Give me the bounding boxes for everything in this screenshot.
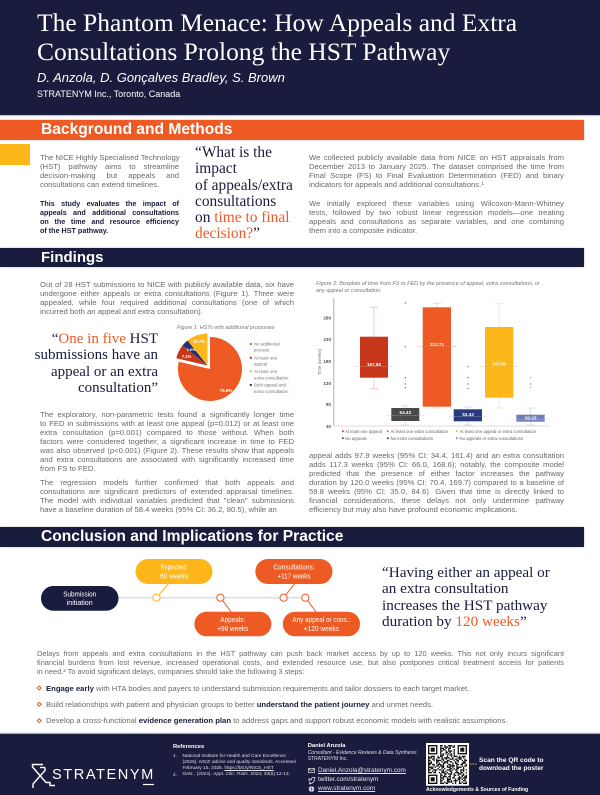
quote: research question: of appeals/extra xyxy=(195,177,293,194)
node: submission initiation xyxy=(41,586,118,611)
quote: research question: “What is the xyxy=(195,144,272,161)
y axis: 80 xyxy=(326,402,331,407)
text: data collected: December 2013 to January 2025. The dataset comprised the time from xyxy=(309,162,564,171)
figure 1 caption: Figure 1. HSTs with additional processes xyxy=(177,325,274,331)
heading: findings: Findings xyxy=(41,249,104,266)
QR call to action: download the poster xyxy=(479,765,543,772)
reference list: National Institute for Health and Care Excellence xyxy=(182,754,286,758)
pie legend: No additional xyxy=(254,342,280,347)
text: data collected: We collected publicly available data from NICE on HST appraisals from xyxy=(309,152,564,162)
quote: one in five: appeal or an extra xyxy=(51,364,158,380)
box: at least one appeal or extra consultation xyxy=(480,303,518,408)
text: exploratory tests: The exploratory, non-parametric tests found a significantly longer time xyxy=(40,410,294,419)
bullet icons xyxy=(37,686,41,723)
authors: D. Anzola, D. Gonçalves Bradley, S. Brown xyxy=(37,70,285,85)
references heading: References xyxy=(173,744,204,750)
pie chart: HSTs with additional processes: 10.7% xyxy=(193,339,205,344)
pie legend: extra consultation xyxy=(254,375,289,380)
logo wordmark: STRATENYM xyxy=(52,767,155,783)
quote: 120 weeks: increases the HST pathway xyxy=(382,597,547,614)
recommendation 1: Engage early with HTA bodies and payers to understand submission requirements and tailor dossiers to each target market. xyxy=(46,684,469,692)
text: exploratory tests: factors were considered together, a significant increase in time to FED xyxy=(40,437,294,446)
text: conclusion paragraph: Delays from appeals and extra consultations in the HST pathway can push back market access by up to 120 weeks. This not only incurs significant xyxy=(37,649,564,658)
text: statistical methods: We initially explored these variables using Wilcoxon-Mann-Whitney xyxy=(309,198,564,208)
box: at least one extra consultation: 212.71 xyxy=(430,342,444,347)
quote: one in five: submissions have an xyxy=(35,347,158,363)
text: regression models: have a baseline duration of 58.4 weeks (95% CI: 36.2, 80.5), while an xyxy=(40,505,277,514)
text: data collected xyxy=(309,152,564,189)
quote: 120 weeks: an extra consultation xyxy=(382,580,509,597)
text: study aim: on the time and resource efficiency xyxy=(40,217,179,226)
text: background intro: The NICE Highly Specialised Technology xyxy=(40,152,180,162)
text: regression results: adds 117.3 weeks (95% CI: 66.0, 168.6); notably, the composite model xyxy=(309,460,564,469)
timeline diagram xyxy=(41,559,360,636)
quote: research question xyxy=(195,144,293,242)
text: exploratory tests: extra consultation (p=0.001) compared to those without. When both xyxy=(40,428,294,437)
text: regression results: efficiency but may also have profound economic implications. xyxy=(309,505,517,514)
node: expected 60 weeks: 60 weeks xyxy=(160,572,188,580)
y axis: 230 xyxy=(323,337,331,342)
node: expected 60 weeks: Expected: xyxy=(160,562,188,572)
footer banner xyxy=(0,734,600,795)
quote: research question: on time to final xyxy=(195,209,289,226)
text: regression results: appeal adds 97.9 weeks (95% CI: 34.4, 161.4) and an extra consultation xyxy=(309,450,564,460)
box: no appeals: 54.43 xyxy=(400,410,411,415)
y axis: 180 xyxy=(323,359,331,364)
text: statistical methods: appeals and consultations as separate variables, and one combining xyxy=(309,217,564,226)
text: conclusion paragraph: financial burdens from lost revenue, increased operational costs, and extended resource use, but also postpones critical treatment access for patients xyxy=(37,658,564,667)
pie chart: HSTs with additional processes xyxy=(176,334,242,401)
heading: conclusion: Conclusion and Implications for Practice xyxy=(41,528,343,545)
arrow: QR pointer xyxy=(470,763,477,765)
boxplot legend: No appeals xyxy=(345,436,367,441)
pie chart: HSTs with additional processes: 3.6% xyxy=(186,347,196,352)
title: Consultations Prolong the HST Pathway xyxy=(37,37,450,66)
quote: one in five: consultation” xyxy=(78,380,158,396)
text: background intro: (HST) pathway aims to streamline xyxy=(40,162,179,171)
quote: one in five xyxy=(35,331,158,396)
text: conclusion paragraph: in need.² To avoid significant delays, companies should take the following 3 steps: xyxy=(37,667,304,676)
QR call to action: Scan the QR code to xyxy=(479,757,543,764)
box: no extra consultations: 53.43 xyxy=(462,412,474,417)
text: study aim: of the HST pathway. xyxy=(40,226,108,235)
reference list: 1. xyxy=(173,754,177,758)
text: regression results: 59.8 weeks (95% CI: 35.0, 84.6). Given that time is directly linked to xyxy=(309,487,564,496)
title: The Phantom Menace: How Appeals and Extra xyxy=(37,8,517,37)
QR call to action xyxy=(479,757,544,772)
node: submission initiation: Submission xyxy=(63,590,96,598)
figure 2 caption xyxy=(316,281,540,294)
reference list: February 15, 2025. https://bit.ly/NICE_HST xyxy=(182,766,274,771)
node: appeals +98 weeks: +98 weeks xyxy=(217,624,248,633)
node: any appeal or consultation +120 weeks: Any appeal or cons.: xyxy=(292,615,350,624)
pie legend: At least one xyxy=(254,369,278,374)
boxplot legend: At least one appeal or extra consultation xyxy=(460,429,537,434)
contact details: STRATENYM Inc. xyxy=(308,756,348,762)
quote: research question: consultations xyxy=(195,193,276,210)
contact details: Consultant - Evidence Reviews & Data Synthesis xyxy=(308,750,417,756)
text: regression models xyxy=(40,478,294,514)
node: any appeal or consultation +120 weeks: +120 weeks xyxy=(304,624,339,633)
node: consultations +117 weeks: +117 weeks xyxy=(278,572,311,580)
quote: one in five: “One in five HST xyxy=(52,331,158,347)
header banner xyxy=(0,0,600,115)
box: no appeals or extra consultations: 50.23 xyxy=(525,416,537,420)
pie legend: appeal xyxy=(254,362,267,367)
text: regression results: predicted that the presence of either factor increases the pathway xyxy=(309,469,564,478)
text: exploratory tests: was also observed (p<0.001) (Figure 2). These results show that appeals xyxy=(40,446,294,455)
heading: conclusion xyxy=(0,527,584,547)
affiliation: STRATENYM Inc., Toronto, Canada xyxy=(37,89,180,99)
text: regression results: duration by 120.0 weeks (95% CI: 70.4, 169.7) compared to a baseline of xyxy=(309,478,564,487)
timeline track xyxy=(118,597,305,599)
text: statistical methods: them into a composite indicator. xyxy=(309,226,417,235)
reference list: 2. xyxy=(173,772,177,778)
title xyxy=(37,8,517,66)
node: appeals +98 weeks: Appeals: xyxy=(220,615,245,624)
pie legend: process xyxy=(254,348,270,353)
pie legend: At least one xyxy=(254,356,278,360)
box: at least one appeal: 167.80 xyxy=(367,362,381,367)
text: study aim: This study evaluates the impact of xyxy=(40,198,179,208)
quote: research question: decision?” xyxy=(195,225,260,242)
box: no extra consultations xyxy=(449,366,487,425)
quote: 120 weeks: “Having either an appeal or xyxy=(382,564,550,581)
twitter: twitter.com/stratenym xyxy=(318,776,378,783)
email: Daniel.Anzola@stratenym.com xyxy=(318,767,406,774)
pie legend xyxy=(250,342,289,394)
boxplot legend: No appeals or extra consultations xyxy=(460,436,523,441)
text: study aim xyxy=(40,198,180,235)
text: findings intro: appealed, while four required additional consultations (one of which xyxy=(40,298,294,307)
quote: 120 weeks xyxy=(382,564,550,630)
text: exploratory tests: and extra consultations are associated with significantly increased time xyxy=(40,455,294,464)
text: study aim: appeals and additional consultations xyxy=(40,208,179,217)
text: statistical methods xyxy=(309,198,564,235)
text: background intro: decision-making but appeals and xyxy=(40,171,179,180)
text: regression models: The model with individual variables predicted that "clean" submissions xyxy=(40,496,294,505)
figure 2 caption: Figure 2: Boxplots of time from FS to FED by the presence of appeal, extra consultations, or xyxy=(316,281,540,287)
text: exploratory tests: to FED in submissions with at least one appeal (p=0.012) or at least one xyxy=(40,419,294,428)
text: data collected: indicators for appeals and additional consultations.¹ xyxy=(309,180,484,189)
box: at least one appeal xyxy=(355,307,392,389)
y axis: 280 xyxy=(323,316,331,320)
boxplot legend xyxy=(342,429,537,441)
recommendation 2: Build relationships with patient and physician groups to better understand the patient journey and unmet needs. xyxy=(46,700,433,709)
text: background intro: consultations can extend timelines. xyxy=(40,180,159,189)
icon: twitter xyxy=(309,778,315,784)
yellow accent block xyxy=(0,144,30,165)
pie chart: HSTs with additional processes: 7.1% xyxy=(182,354,192,359)
figure 2 caption: any appeal or consultation xyxy=(316,288,380,294)
icon: globe xyxy=(309,786,314,792)
node: consultations +117 weeks: Consultations: xyxy=(274,562,314,572)
y axis: 130 xyxy=(323,381,331,386)
text: conclusion paragraph xyxy=(37,649,564,676)
pie legend: extra consultation xyxy=(254,389,289,394)
text: regression models: consultations are significant predictors of extended appraisal timelines. xyxy=(40,487,294,496)
box: no appeals xyxy=(387,302,424,425)
icon: email xyxy=(308,768,314,773)
text: regression models: The regression models further confirmed that both appeals and xyxy=(40,478,294,487)
text: exploratory tests: from FS to FED. xyxy=(40,464,96,473)
text: findings intro: Out of 28 HST submissions to NICE with publicly available data, six have xyxy=(40,280,294,289)
quote: 120 weeks: duration by 120 weeks” xyxy=(382,613,527,630)
box: no appeals or extra consultations xyxy=(511,377,550,425)
y axis: 30 xyxy=(326,424,331,429)
node: expected 60 weeks xyxy=(136,559,212,601)
acknowledgements: Acknowledgements & Sources of Funding xyxy=(426,786,528,792)
QR code xyxy=(426,743,469,786)
text: data collected: Final Scope (FS) to Final Evaluation Determination (FED) and binary xyxy=(309,171,564,180)
y axis: Time (weeks) xyxy=(317,348,322,375)
reference list: (2025). NICE advice and quality standards. Accessed xyxy=(182,760,296,765)
text: background intro xyxy=(40,152,180,189)
text: regression results: financial considerations, these delays not only undermine pathway xyxy=(309,496,564,505)
boxplot chart: time from FS to FED xyxy=(317,298,550,429)
recommendation 3: Develop a cross-functional evidence generation plan to address gaps and support robust economic models with realistic assumptions. xyxy=(46,716,507,725)
reference list xyxy=(173,754,296,778)
reference list: Getz.. (2024). Appl. Clin. Trials. 2024; 33(6):12-13. xyxy=(182,772,290,777)
text: regression results xyxy=(309,450,564,514)
box: at least one extra consultation xyxy=(417,303,456,408)
quote: research question: impact xyxy=(195,160,237,177)
node: any appeal or consultation +120 weeks xyxy=(283,594,360,636)
heading: background and methods: Background and Methods xyxy=(41,121,232,138)
text: exploratory tests xyxy=(40,410,294,473)
text: findings intro: undergone either appeals or extra consultations (Figure 1). Three were xyxy=(40,289,294,298)
text: findings intro: incurred both an appeal and extra consultation). xyxy=(40,307,203,316)
text: findings intro xyxy=(40,280,294,316)
icon: hourglass logo xyxy=(32,764,154,788)
website: www.stratenym.com xyxy=(318,785,375,792)
boxplot legend: No extra consultations xyxy=(390,436,433,441)
box: at least one appeal or extra consultation: 167.80 xyxy=(492,362,507,366)
node: submission initiation: initiation xyxy=(67,598,93,607)
contact details xyxy=(308,743,417,762)
heading: background and methods xyxy=(0,120,584,140)
node: appeals +98 weeks xyxy=(194,594,271,636)
node: consultations +117 weeks xyxy=(255,559,332,601)
pie legend: Both appeal and xyxy=(254,383,287,388)
text: statistical methods: tests, followed by two robust linear regression models—one treating xyxy=(309,208,564,217)
pie chart: HSTs with additional processes: 78.6% xyxy=(220,388,232,393)
heading: findings xyxy=(0,248,584,267)
boxplot legend: At least one appeal xyxy=(345,429,382,434)
contact details: Daniel Anzola xyxy=(308,743,345,749)
y axis xyxy=(317,298,550,429)
boxplot legend: At least one extra consultation xyxy=(390,429,449,434)
